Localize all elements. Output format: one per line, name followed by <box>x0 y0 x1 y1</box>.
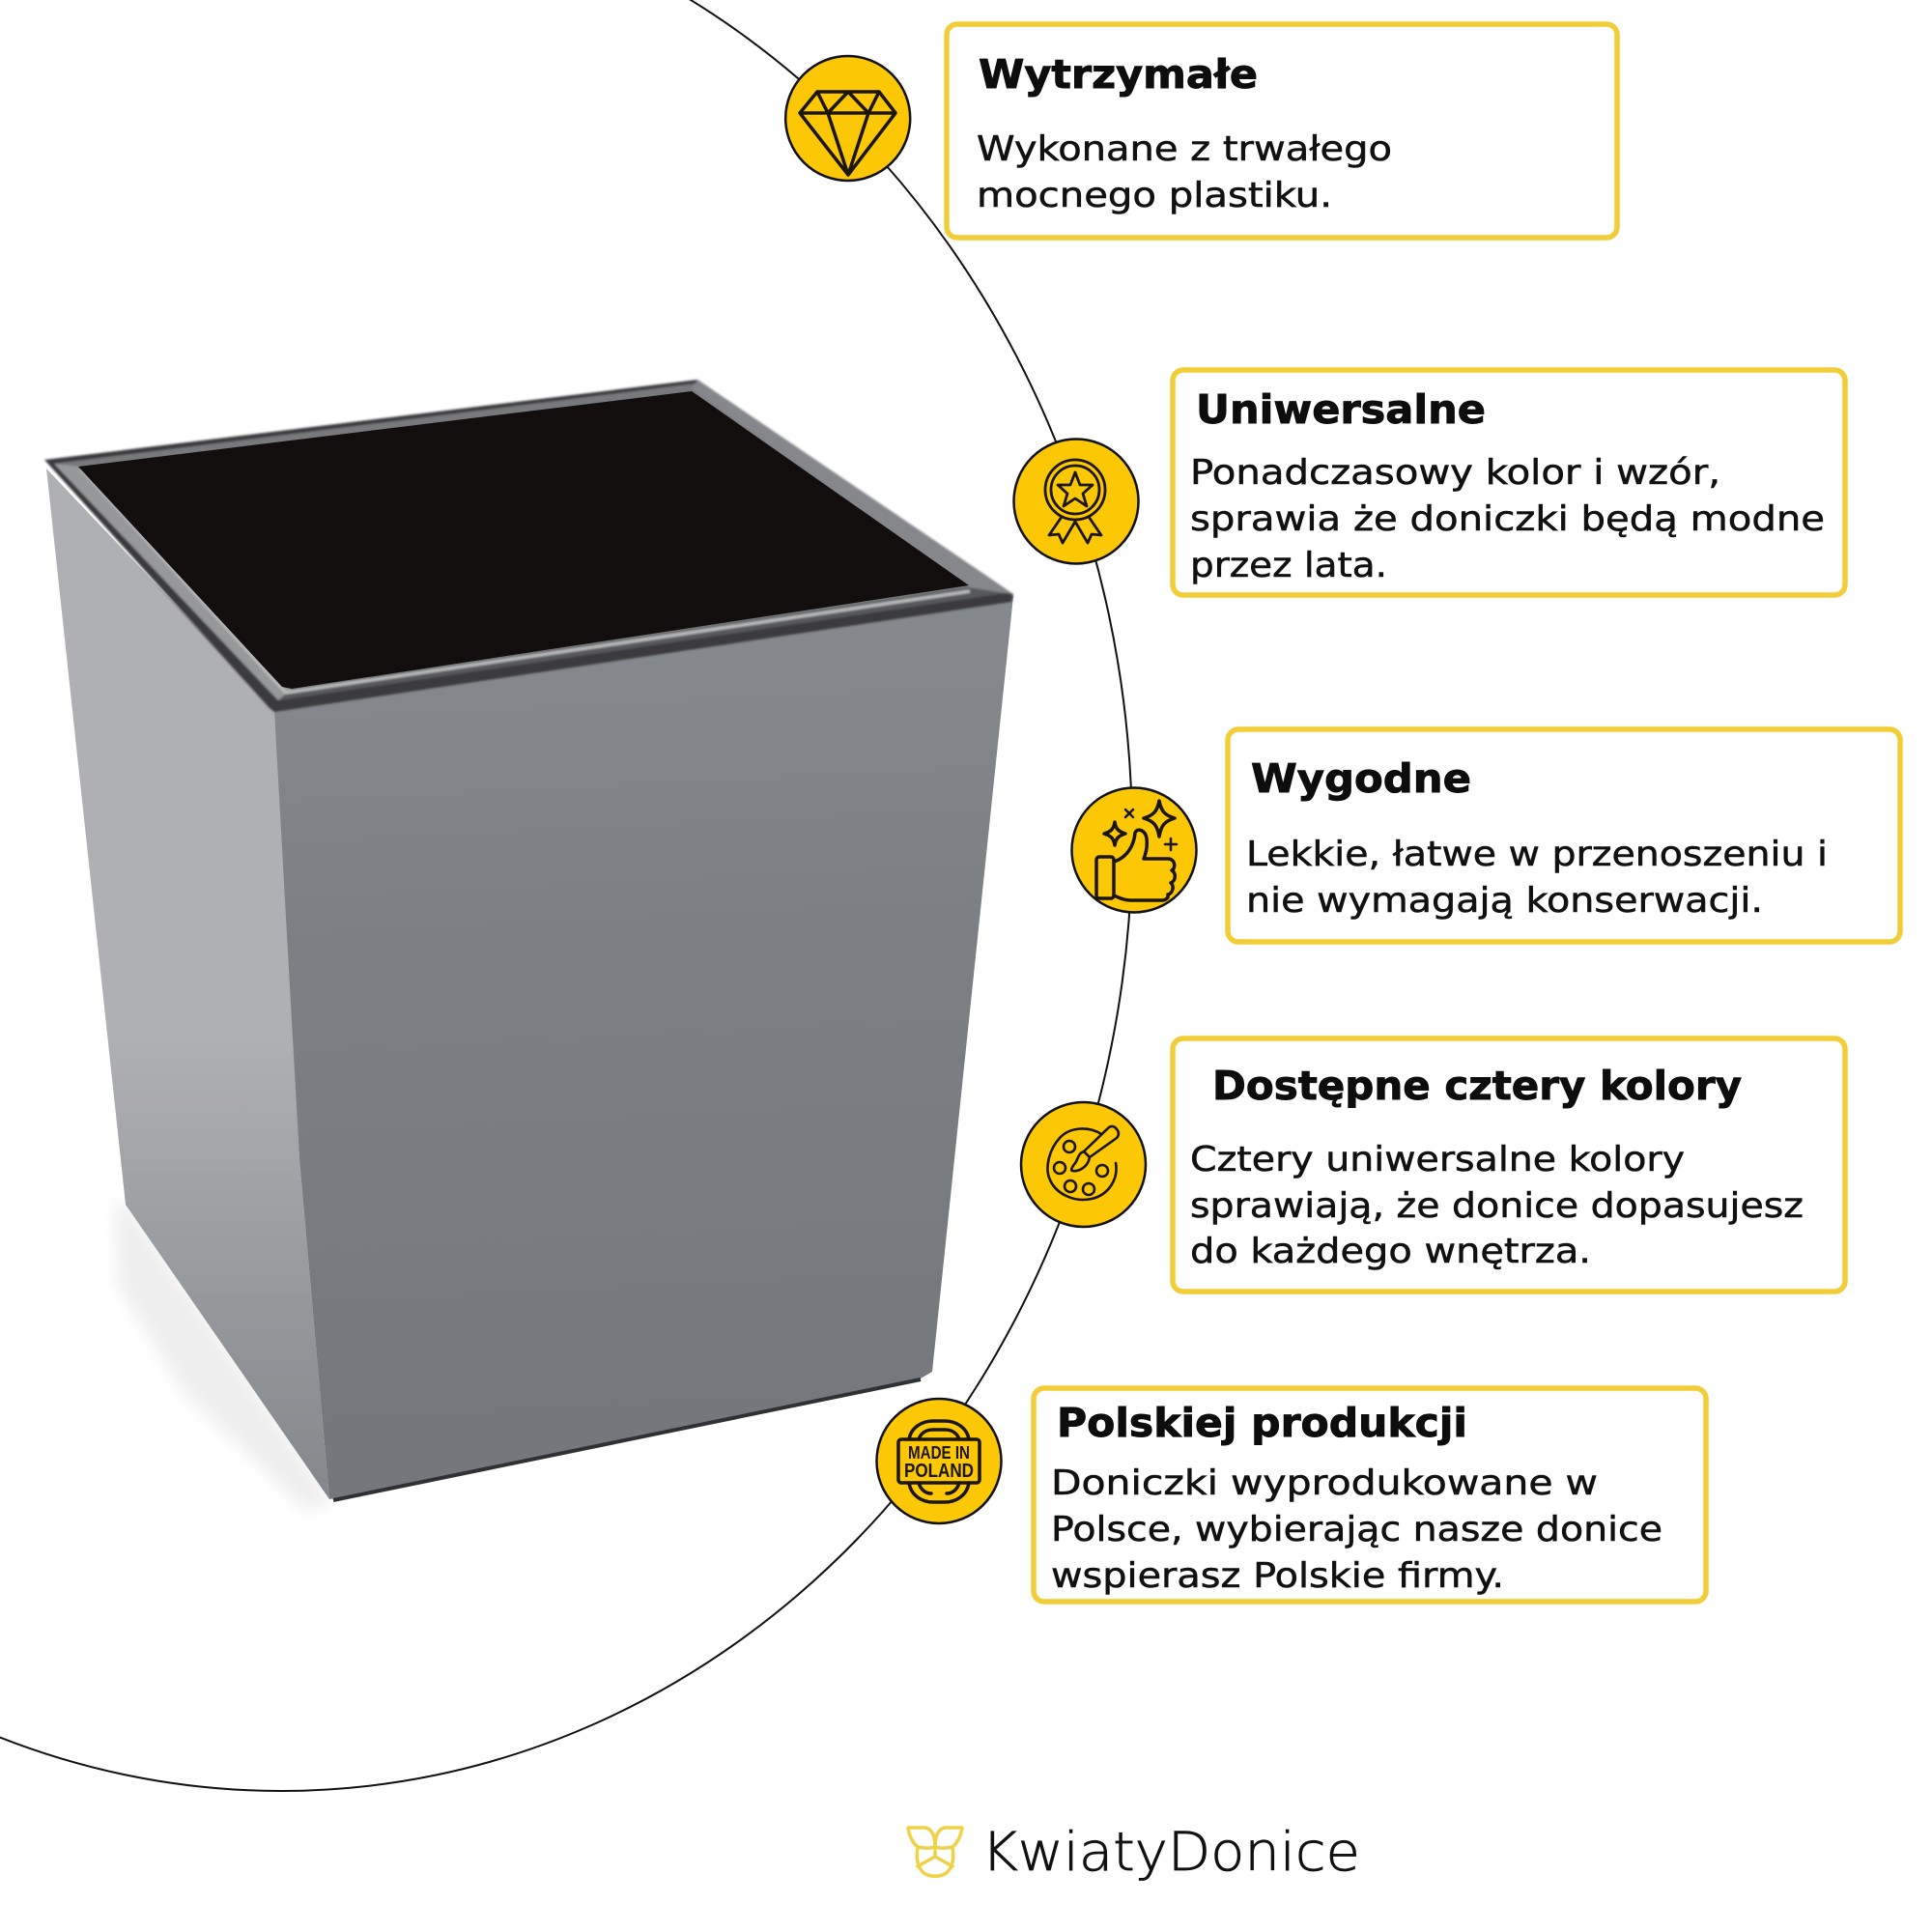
icon: made in Poland stamp: MADE IN <box>908 1443 970 1463</box>
icon: thumbs up with sparkles <box>1072 788 1196 912</box>
item 3: convenient <box>1228 729 1900 942</box>
body text: Polsce, wybierając nasze donice <box>1051 1510 1662 1549</box>
body text: Lekkie, łatwe w przenoszeniu i <box>1246 835 1828 874</box>
body text <box>977 129 1392 215</box>
heading: Wytrzymałe <box>979 51 1258 98</box>
icon: diamond <box>785 56 910 181</box>
body text <box>1051 1463 1662 1596</box>
body text <box>1190 453 1825 585</box>
card border <box>1228 729 1900 942</box>
planter shadow <box>116 1203 333 1509</box>
body text <box>1190 1140 1804 1271</box>
card border <box>1173 370 1845 595</box>
body text: wspierasz Polskie firmy. <box>1051 1556 1504 1596</box>
heading: Polskiej produkcji <box>1057 1400 1467 1446</box>
heading: Uniwersalne <box>1196 386 1486 433</box>
icon: made in Poland stamp: POLAND <box>904 1461 974 1482</box>
body text: Doniczki wyprodukowane w <box>1051 1463 1598 1503</box>
planter right face <box>274 596 1013 1499</box>
planter rim <box>44 380 1013 712</box>
planter interior <box>78 391 969 689</box>
card border <box>947 24 1617 238</box>
card border <box>1173 1038 1845 1292</box>
body text: Wykonane z trwałego <box>977 129 1392 169</box>
body text: mocnego plastiku. <box>977 176 1332 215</box>
item 2: universal <box>1173 370 1845 595</box>
icon: paint palette and brush <box>1021 1102 1146 1227</box>
body text: Cztery uniwersalne kolory <box>1190 1140 1685 1179</box>
logo: KwiatyDonice <box>908 1821 1360 1883</box>
heading: Wygodne <box>1251 755 1471 802</box>
body text: przez lata. <box>1190 546 1387 585</box>
item 1: durable <box>947 24 1617 238</box>
item 5: made in Poland <box>1034 1388 1706 1602</box>
body text: sprawiają, że donice dopasujesz <box>1190 1186 1804 1226</box>
planter base edge <box>333 1379 921 1500</box>
body text: do każdego wnętrza. <box>1190 1232 1591 1271</box>
body text: nie wymagają konserwacji. <box>1246 881 1763 921</box>
card border <box>1034 1388 1706 1602</box>
brand name: KwiatyDonice <box>981 1821 1360 1883</box>
body text <box>1246 835 1828 921</box>
item 4: four colours <box>1173 1038 1845 1292</box>
icon: butterfly <box>908 1828 962 1876</box>
icon: award medal <box>1014 439 1138 564</box>
body text: sprawia że doniczki będą modne <box>1190 499 1825 539</box>
planter left face <box>46 469 329 1499</box>
icon: made in Poland stamp <box>877 1399 1001 1523</box>
heading: Dostępne cztery kolory <box>1212 1063 1742 1109</box>
body text: Ponadczasowy kolor i wzór, <box>1190 453 1720 493</box>
decorative arc connecting the icons <box>0 0 1132 1791</box>
product image: grey square planter <box>44 380 1013 1509</box>
